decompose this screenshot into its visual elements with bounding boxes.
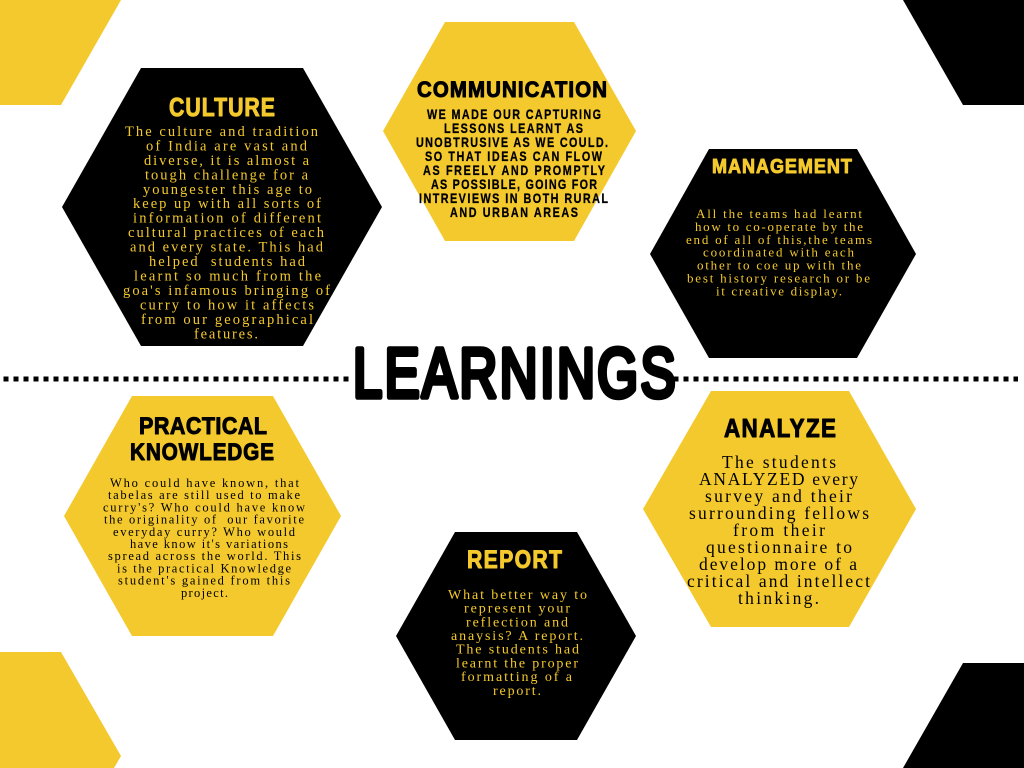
text block: practical knowledge body: Who could have known, that: [110, 476, 300, 490]
text block: communication body: AS POSSIBLE, GOING FOR: [431, 177, 597, 192]
text block: analyze body: [687, 452, 870, 608]
panel: communication: [383, 22, 636, 241]
text block: analyze body: thinking.: [738, 588, 819, 608]
text block: communication body: UNOBTRUSIVE AS WE COULD.: [416, 135, 608, 150]
text block: report body: anaysis? A report.: [451, 629, 583, 644]
text block: practical knowledge body: the originality of our favorite: [104, 513, 304, 527]
text block: report body: What better way to: [448, 588, 587, 603]
panel: culture: [62, 68, 382, 346]
text block: management body: it creative display.: [716, 283, 842, 298]
text block: communication body: AND URBAN AREAS: [450, 205, 578, 220]
text block: analyze body: ANALYZED every: [699, 469, 858, 489]
text block: analyze body: develop more of a: [699, 554, 857, 574]
text block: practical knowledge body: curry's? Who could have know: [103, 500, 305, 514]
text block: culture body: goa's infamous bringing of: [123, 283, 330, 299]
corner: bottom right black: [903, 663, 1024, 768]
text block: report body: formatting of a: [461, 670, 573, 685]
text block: culture body: cultural practices of each: [128, 225, 325, 241]
heading: management: MANAGEMENT: [712, 156, 852, 178]
panel: management: [650, 149, 916, 358]
text block: analyze body: surrounding fellows: [689, 503, 869, 523]
text block: communication body: AS FREELY AND PROMPTLY: [423, 163, 605, 178]
text block: management body: other to coe up with the: [697, 258, 861, 273]
text block: culture body: diverse, it is almost a: [144, 153, 310, 169]
text block: culture body: curry to how it affects: [140, 297, 314, 313]
text block: culture body: [123, 124, 330, 342]
text block: culture body: helped students had: [149, 254, 306, 270]
corner: bottom left yellow: [0, 652, 121, 768]
text block: management body: best history research or be: [687, 270, 870, 286]
text block: practical knowledge body: tabelas are still used to make: [108, 488, 300, 502]
heading: culture: CULTURE: [169, 93, 275, 123]
heading: analyze: ANALYZE: [724, 415, 836, 443]
text block: culture body: tough challenge for a: [145, 167, 309, 183]
corner: top left yellow: [0, 0, 121, 105]
text block: practical knowledge body: [103, 476, 305, 600]
text block: report body: The students had: [456, 643, 579, 658]
text block: analyze body: survey and their: [705, 486, 852, 506]
text block: report body: report.: [493, 684, 541, 699]
heading: practical knowledge: [130, 412, 274, 465]
corner: top right black: [903, 0, 1024, 105]
text block: report body: learnt the proper: [456, 656, 578, 672]
text block: report body: represent your: [464, 602, 570, 617]
text block: practical knowledge body: have know it's variations: [130, 537, 288, 551]
heading: practical knowledge: KNOWLEDGE: [130, 437, 274, 465]
heading: practical knowledge: PRACTICAL: [139, 412, 267, 439]
text block: practical knowledge body: spread across the world. This: [108, 549, 301, 563]
text block: culture body: The culture and tradition: [125, 124, 319, 140]
text block: culture body: from our geographical: [141, 312, 313, 328]
text block: practical knowledge body: everyday curry? Who would: [113, 525, 296, 539]
panel: report: [396, 532, 636, 740]
text block: culture body: and every state. This had: [130, 240, 324, 256]
text block: practical knowledge body: is the practical Knowledge: [117, 561, 291, 575]
heading: report: REPORT: [467, 545, 562, 573]
text block: analyze body: from their: [733, 520, 825, 540]
text block: communication body: [416, 107, 608, 220]
text block: communication body: SO THAT IDEAS CAN FLOW: [425, 149, 602, 164]
heading: communication: COMMUNICATION: [417, 77, 607, 102]
text block: management body: end of all of this,the teams: [686, 232, 872, 247]
text block: analyze body: critical and intellect: [687, 571, 870, 591]
text block: practical knowledge body: project.: [181, 586, 228, 600]
text block: analyze body: questionnaire to: [706, 537, 852, 557]
text block: culture body: learnt so much from the: [134, 268, 321, 284]
text block: communication body: WE MADE OUR CAPTURING: [427, 107, 601, 122]
text block: report body: [448, 588, 587, 699]
text block: management body: how to co-operate by the: [695, 219, 863, 234]
text block: communication body: INTREVIEWS IN BOTH RURAL: [419, 191, 608, 206]
text block: analyze body: The students: [722, 452, 836, 472]
text block: communication body: LESSONS LEARNT AS: [444, 121, 583, 136]
text block: culture body: features.: [194, 326, 258, 342]
text block: management body: [686, 206, 872, 298]
text block: culture body: keep up with all sorts of: [133, 196, 321, 212]
text block: management body: All the teams had learnt: [696, 206, 862, 221]
panel: analyze: [643, 391, 916, 627]
title: learnings: LEARNINGS: [353, 335, 676, 413]
text block: management body: coordinated with each: [703, 245, 854, 260]
text block: culture body: youngester this age to: [143, 182, 312, 198]
text block: practical knowledge body: student's gained from this: [118, 574, 290, 588]
text block: culture body: of India are vast and: [146, 138, 308, 154]
text block: report body: reflection and: [466, 615, 568, 630]
text block: culture body: information of different: [133, 211, 321, 227]
panel: practical knowledge: [64, 396, 341, 636]
